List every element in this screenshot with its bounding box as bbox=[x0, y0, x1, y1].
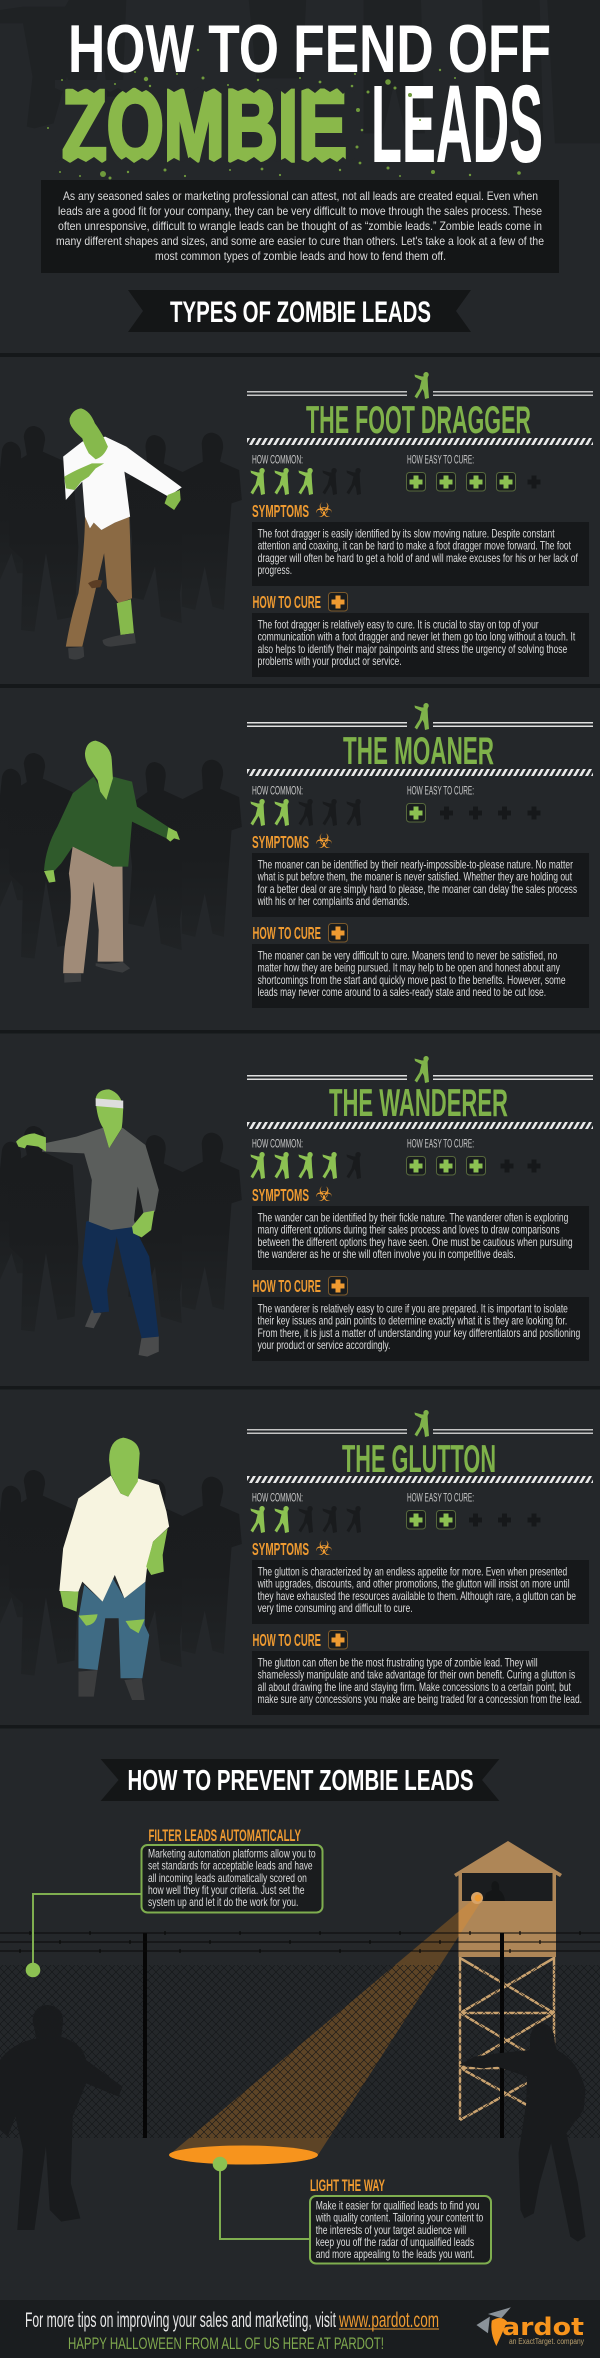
guard silhouette bbox=[484, 1881, 505, 1901]
character: glutton bbox=[59, 1438, 169, 1700]
how easy to cure rating: HOW EASY TO CURE: bbox=[407, 1492, 474, 1504]
cure text: your product or service accordingly. bbox=[258, 1338, 390, 1352]
watchtower bbox=[454, 1841, 562, 2120]
pardot logo: ardot bbox=[502, 2313, 584, 2341]
footer: HAPPY HALLOWEEN FROM ALL OF US HERE AT PARDOT! bbox=[68, 2335, 384, 2353]
panel: the wanderer bbox=[0, 1056, 593, 1361]
panel: the foot dragger bbox=[0, 372, 593, 677]
callout: filter leads automatically: system up and let it do the work for you. bbox=[148, 1895, 298, 1909]
callout: light the way: LIGHT THE WAY bbox=[310, 2177, 385, 2195]
symptoms heading bbox=[252, 1182, 333, 1206]
panel: the glutton bbox=[0, 1410, 593, 1715]
character: moaner bbox=[44, 741, 180, 983]
symptoms text bbox=[252, 1560, 589, 1624]
footer: www.pardot.com bbox=[338, 2309, 439, 2332]
symptoms heading: ☣ bbox=[315, 829, 333, 853]
how to cure heading: HOW TO CURE bbox=[252, 592, 321, 612]
character: wanderer bbox=[16, 1089, 159, 1357]
jagged edges on zombie word bbox=[55, 80, 355, 94]
zombie icon header bbox=[414, 1410, 429, 1437]
symptoms text: very time consuming and difficult to cure. bbox=[258, 1601, 413, 1615]
how easy to cure rating: HOW EASY TO CURE: bbox=[407, 454, 474, 466]
fence bbox=[0, 1931, 600, 2138]
how easy to cure rating bbox=[406, 454, 540, 491]
how to cure heading: HOW TO CURE bbox=[252, 1630, 321, 1650]
zombie icon header bbox=[414, 372, 429, 399]
how to cure heading: HOW TO CURE bbox=[252, 923, 321, 943]
symptoms heading: SYMPTOMS bbox=[252, 832, 309, 852]
how common rating bbox=[250, 454, 361, 495]
callout: light the way bbox=[213, 2157, 491, 2264]
symptoms heading: SYMPTOMS bbox=[252, 1539, 309, 1559]
searchlight beam bbox=[169, 1892, 483, 2164]
symptoms text bbox=[252, 853, 589, 917]
how common rating: HOW COMMON: bbox=[252, 1138, 303, 1150]
symptoms text: progress. bbox=[258, 563, 292, 577]
panel: the moaner bbox=[0, 703, 593, 1008]
title: ZOMBIE bbox=[62, 70, 347, 182]
callout: filter leads automatically: how well they fit your criteria. Just set the bbox=[148, 1883, 305, 1897]
callout: filter leads automatically bbox=[26, 1827, 322, 1977]
callout: light the way: keep you off the radar of unqualified leads bbox=[316, 2235, 474, 2249]
cure text bbox=[252, 1651, 589, 1715]
callout: light the way: and more appealing to the leads you want. bbox=[316, 2247, 475, 2261]
header silhouettes bbox=[0, 0, 600, 143]
how common rating bbox=[250, 786, 361, 826]
callout: light the way: the interests of your target audience will bbox=[316, 2223, 466, 2237]
symptoms heading: ☣ bbox=[315, 1182, 333, 1206]
how common rating bbox=[250, 1138, 361, 1179]
character: foot dragger bbox=[63, 408, 182, 660]
heading: types of zombie leads: TYPES OF ZOMBIE LEADS bbox=[170, 296, 431, 329]
symptoms heading: SYMPTOMS bbox=[252, 1185, 309, 1205]
how common rating: HOW COMMON: bbox=[252, 1492, 303, 1504]
title bbox=[47, 11, 551, 186]
how common rating: HOW COMMON: bbox=[252, 454, 303, 466]
splatter bbox=[47, 49, 521, 179]
heading: types of zombie leads bbox=[128, 290, 471, 332]
cure text bbox=[252, 944, 589, 1008]
callout: light the way: Make it easier for qualified leads to find you bbox=[316, 2198, 480, 2212]
intro text block: most common types of zombie leads and how to fend them off. bbox=[155, 249, 446, 263]
how easy to cure rating bbox=[406, 1138, 540, 1175]
zombie icon header bbox=[414, 1056, 429, 1083]
cure text bbox=[252, 613, 589, 677]
symptoms text bbox=[252, 522, 589, 586]
cure text: problems with your product or service. bbox=[258, 654, 402, 668]
symptoms text bbox=[252, 1206, 589, 1270]
footer: For more tips on improving your sales and marketing, visit bbox=[25, 2309, 336, 2332]
symptoms text: with his or her complaints and demands. bbox=[257, 894, 410, 908]
pardot logo: an ExactTarget. company bbox=[509, 2337, 584, 2346]
zombie icon header bbox=[414, 703, 429, 730]
callout: light the way: with quality content. Tailoring your content to bbox=[315, 2211, 484, 2225]
how common rating bbox=[250, 1492, 361, 1533]
silhouette: right zombie bbox=[459, 2023, 586, 2242]
symptoms heading: ☣ bbox=[315, 1536, 333, 1560]
callout: filter leads automatically: Marketing automation platforms allow you to bbox=[148, 1846, 316, 1860]
how common rating: HOW COMMON: bbox=[252, 786, 303, 798]
intro text block: As any seasoned sales or marketing professional can attest, not all leads are created equal. Even when bbox=[63, 189, 538, 203]
symptoms heading: ☣ bbox=[315, 498, 333, 522]
silhouette: left zombie bbox=[0, 2005, 122, 2230]
footer bbox=[0, 2300, 600, 2358]
heading: how to prevent zombie leads bbox=[101, 1759, 499, 1801]
name heading: THE MOANER bbox=[343, 730, 494, 773]
symptoms heading: SYMPTOMS bbox=[252, 501, 309, 521]
cure text bbox=[252, 1297, 589, 1361]
callout: filter leads automatically: set standards for acceptable leads and have bbox=[148, 1859, 313, 1873]
how easy to cure rating bbox=[406, 786, 540, 822]
symptoms heading bbox=[252, 498, 333, 522]
how easy to cure rating: HOW EASY TO CURE: bbox=[407, 786, 474, 798]
how easy to cure rating: HOW EASY TO CURE: bbox=[407, 1138, 474, 1150]
pardot logo bbox=[476, 2307, 584, 2346]
symptoms heading bbox=[252, 1536, 333, 1560]
how easy to cure rating bbox=[406, 1492, 540, 1529]
callout: filter leads automatically: all incoming leads automatically scored on bbox=[148, 1871, 307, 1885]
intro text block bbox=[41, 180, 559, 273]
how to cure heading: HOW TO CURE bbox=[252, 1276, 321, 1296]
symptoms heading bbox=[252, 829, 333, 853]
intro text block: often unresponsive, difficult to wrangle leads can be thought of as “zombie leads.” Zombie leads come in bbox=[58, 219, 542, 233]
callout: filter leads automatically: FILTER LEADS AUTOMATICALLY bbox=[148, 1827, 301, 1845]
